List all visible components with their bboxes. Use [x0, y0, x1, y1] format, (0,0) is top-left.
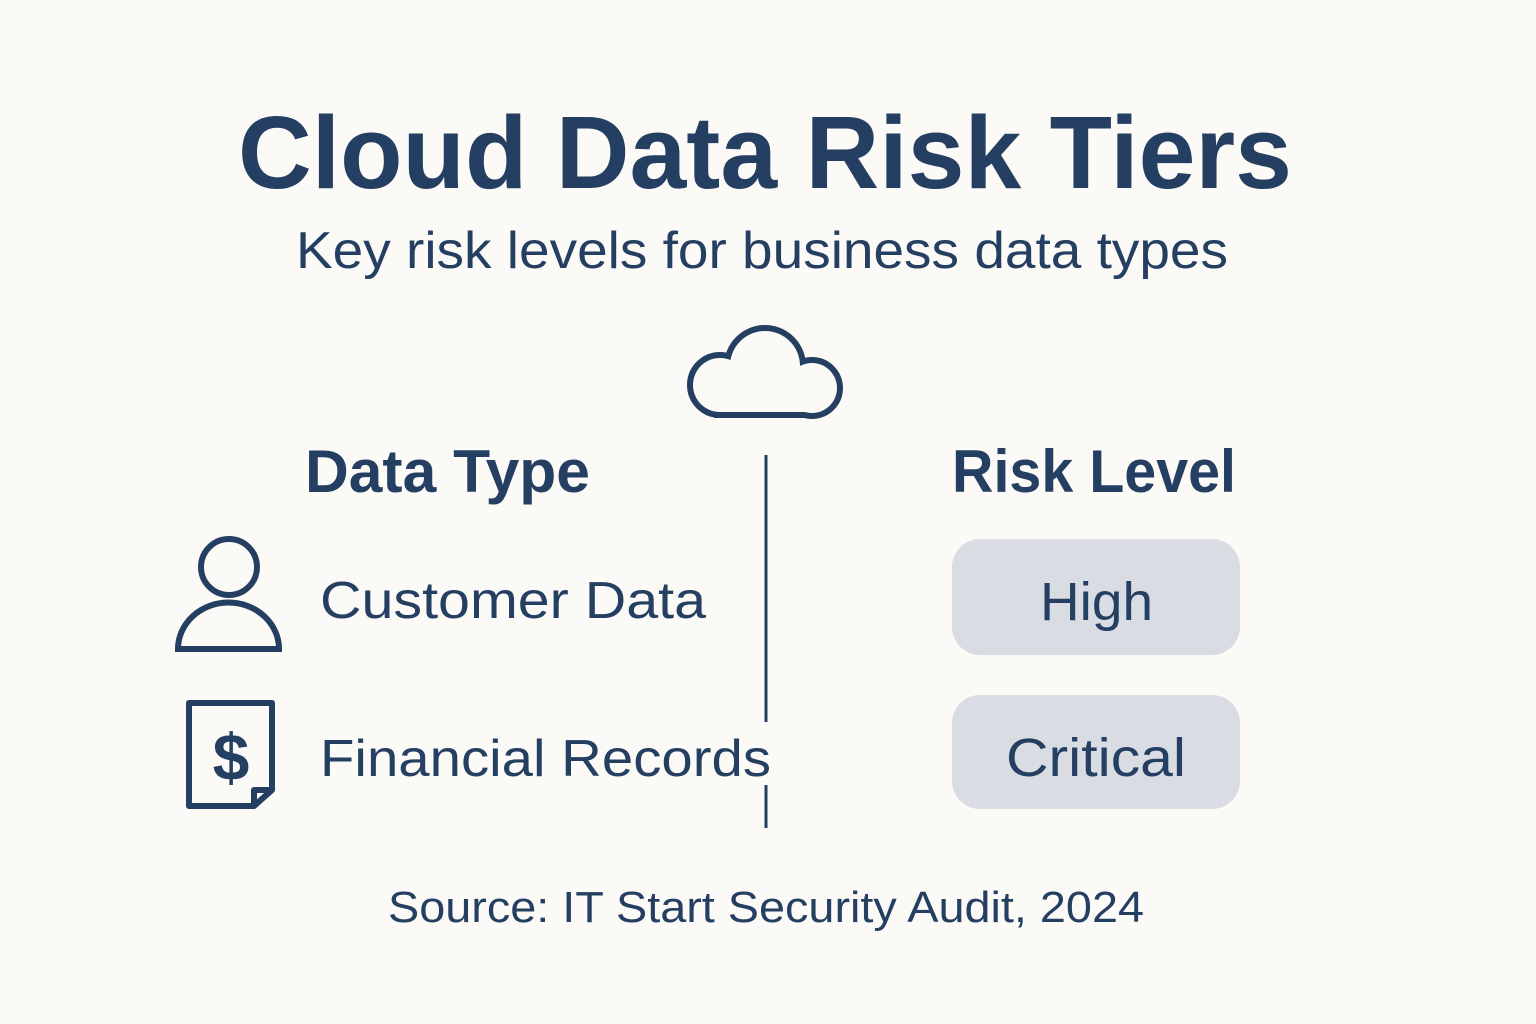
icon: cloud	[693, 331, 837, 413]
title: Cloud Data Risk Tiers	[238, 95, 1292, 210]
divider line	[764, 455, 768, 828]
icon: person	[178, 539, 279, 649]
pill: Critical: Critical	[1006, 728, 1186, 788]
heading: Risk Level: Risk Level	[952, 438, 1236, 505]
pill: High: High	[1040, 572, 1153, 632]
row label: Financial Records: Financial Records	[320, 730, 771, 788]
subtitle: Key risk levels for business data types	[296, 222, 1228, 280]
pill: Critical	[952, 695, 1240, 809]
icon: financial document	[189, 703, 272, 806]
row label: Customer Data: Customer Data	[320, 572, 706, 630]
source: Source: IT Start Security Audit, 2024	[388, 883, 1144, 932]
icon: financial document: $	[213, 720, 249, 794]
pill: High	[952, 539, 1240, 655]
heading: Data Type: Data Type	[305, 438, 590, 505]
